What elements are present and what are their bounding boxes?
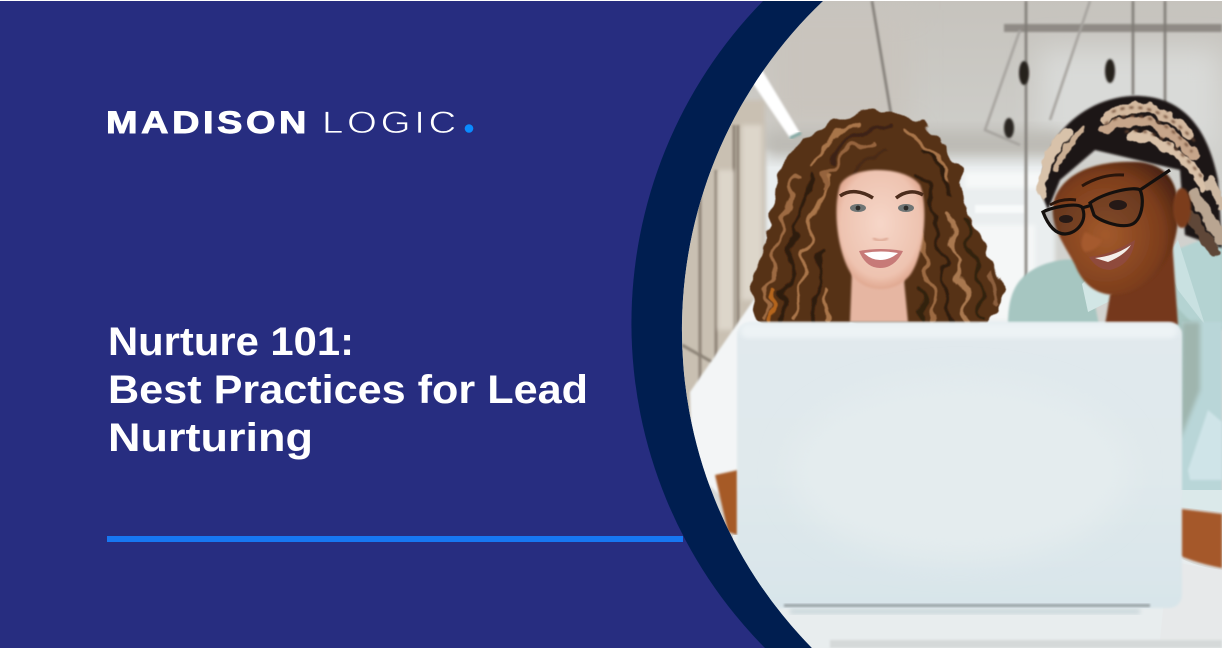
photo: two women looking at a laptop [670,0,1222,648]
title: Best Practices for Lead [108,368,588,412]
logo: Madison Logic: MADISON [106,104,310,140]
woman right: mint shirt [1008,232,1222,510]
woman right: forearm and cuff [1180,490,1222,570]
smile [1089,240,1135,270]
icon: glasses [1043,170,1170,234]
title: Nurturing [108,416,313,460]
woman right: braided hair [1042,96,1222,250]
pipes and pendant fixtures [1004,24,1222,32]
bright far corridor [765,150,1055,340]
eyes [1109,200,1127,210]
woman left: white shirt [689,298,760,536]
woman left: neck [850,270,908,322]
fluorescent ceiling light [752,70,800,138]
logo: Madison Logic: LOGIC [322,104,460,140]
logo: Madison Logic [106,104,473,140]
title: Nurture 101: [108,320,354,364]
woman right: face [1043,162,1191,295]
dark navy arc band [631,1,1222,648]
title [108,320,588,460]
woman left: face [836,170,924,289]
office background [670,0,1222,648]
accent divider line [107,536,683,542]
woman left: curly hair [752,112,1003,326]
left wall panels [680,100,765,420]
table [733,535,1222,648]
woman right: neck [1105,240,1178,325]
laptop lid [737,322,1182,614]
